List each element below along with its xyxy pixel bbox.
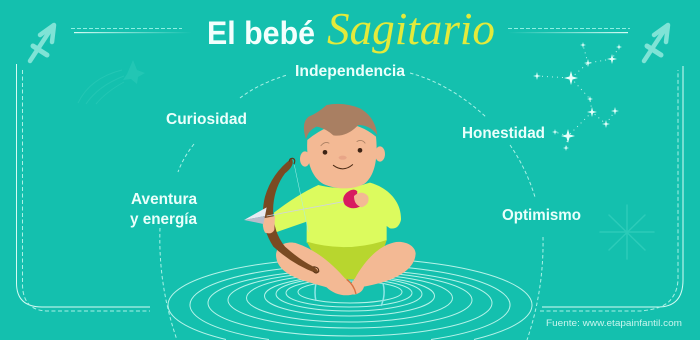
icon: faint sparkle burst xyxy=(600,205,654,259)
diaper xyxy=(307,240,387,279)
label: Aventura y energía: Aventura xyxy=(131,191,197,208)
baby archer xyxy=(244,104,416,295)
label: Honestidad: Honestidad xyxy=(462,125,545,142)
label: Optimismo: Optimismo xyxy=(502,207,581,224)
ripples under the baby xyxy=(168,258,532,340)
baby neck and shirt xyxy=(274,183,401,248)
title xyxy=(207,3,495,54)
label: Aventura y energía xyxy=(130,191,197,228)
bow xyxy=(263,158,319,273)
hair xyxy=(304,104,377,139)
ankle band xyxy=(347,279,356,294)
legs xyxy=(276,242,416,295)
right hand xyxy=(354,193,369,207)
icon: Sagittarius symbol left xyxy=(30,25,54,61)
title: El bebé xyxy=(207,15,315,51)
label: Independencia: Independencia xyxy=(295,63,405,80)
ears xyxy=(300,146,385,167)
decorative frame xyxy=(16,28,683,311)
title: Sagitario xyxy=(327,3,495,54)
dashed arc around the baby xyxy=(160,73,543,340)
icon: faint shooting star xyxy=(78,60,145,104)
left hand xyxy=(263,216,275,233)
label: Curiosidad: Curiosidad xyxy=(166,111,247,128)
red object in hand xyxy=(343,190,360,208)
constellation xyxy=(533,42,622,151)
arrow xyxy=(244,202,343,224)
icon: Sagittarius symbol right xyxy=(644,25,668,61)
label: Aventura y energía: y energía xyxy=(130,211,197,228)
source credit: Fuente: www.etapainfantil.com xyxy=(546,318,682,329)
head xyxy=(307,124,377,188)
face xyxy=(321,140,365,169)
